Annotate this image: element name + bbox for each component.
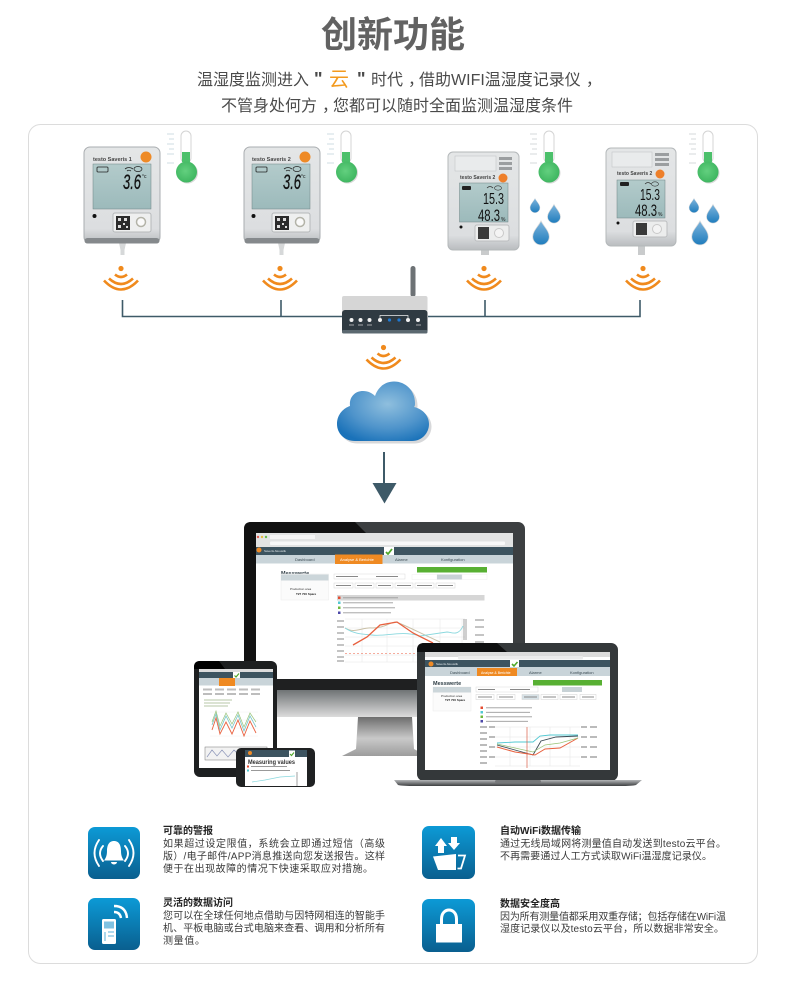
feature: flexible data access: 您可以在全球任何地点借助与因特网相连的智能手 xyxy=(163,909,385,922)
feature: reliable alarm xyxy=(88,824,385,879)
arrow: cloud to dashboard xyxy=(372,452,396,504)
device: desktop monitor xyxy=(244,522,525,756)
device: desktop monitor: Konfiguration xyxy=(441,557,465,562)
device: logger 1 xyxy=(84,147,160,255)
icon: folder with arrows xyxy=(422,826,475,879)
subtitle: " xyxy=(357,69,366,89)
feature: high data security xyxy=(422,897,726,952)
device: logger 3: 48.3 xyxy=(478,206,500,225)
device: logger 2: 3.6 xyxy=(283,171,301,194)
device: logger 1: testo Saveris 1 xyxy=(93,157,132,163)
icon: router xyxy=(342,266,428,334)
device: logger 1: 3.6 xyxy=(123,171,141,194)
feature: high data security: 湿度记录仪以及testo云平台，所以数据非常安全。 xyxy=(500,922,724,935)
subtitle: 不管身处何方 ，您都可以随时全面监测温湿度条件 xyxy=(221,97,573,115)
icon: wifi 4 xyxy=(626,266,660,290)
device: phone: Measuring values xyxy=(248,760,296,766)
feature: automatic WiFi transfer xyxy=(422,824,726,879)
feature: high data security: 因为所有测量值都采用双重存储；包括存储在WiFi温 xyxy=(500,910,726,923)
device: logger 3: testo Saveris 2 xyxy=(460,175,496,181)
feature: reliable alarm: 可靠的警报 xyxy=(163,824,213,837)
device: laptop: T27 700 Spare xyxy=(445,698,466,702)
device: phone xyxy=(236,748,315,787)
device: tablet xyxy=(194,661,277,777)
feature: flexible data access xyxy=(88,896,385,950)
icon: wifi 2 xyxy=(263,266,297,290)
icon: cloud xyxy=(337,382,432,444)
feature: reliable alarm: 便于在出现故障的情况下快速采取应对措施。 xyxy=(163,862,373,875)
device: laptop: Saveris Akoustik xyxy=(436,662,459,666)
feature: flexible data access: 测量值。 xyxy=(163,934,205,947)
icon: water drops 3 xyxy=(530,198,560,245)
device: laptop: Messwerte xyxy=(433,681,461,687)
device: logger 1: °c xyxy=(142,174,147,180)
device: logger 3: % xyxy=(501,217,506,223)
device: laptop: Production area xyxy=(441,694,463,698)
icon: phone with wireless xyxy=(88,898,140,950)
device: desktop monitor: Saveris Akoustik xyxy=(264,549,287,553)
feature: reliable alarm: 如果超过设定限值，系统会立即通过短信（高级 xyxy=(163,837,385,850)
icon: thermometer 4 xyxy=(689,131,720,184)
device: laptop: Dashboard xyxy=(450,670,470,675)
icon: water drops 4 xyxy=(689,198,719,245)
device: desktop monitor: Messwerte xyxy=(281,571,309,577)
device: laptop: Konfiguration xyxy=(570,670,594,675)
panel: main card xyxy=(28,124,758,964)
icon: padlock xyxy=(422,899,475,952)
feature: automatic WiFi transfer: 自动WiFi数据传输 xyxy=(500,824,581,837)
device: desktop monitor: Production area xyxy=(290,587,312,591)
icon: wifi router to cloud xyxy=(366,345,400,368)
device: laptop: Analyse & Berichte xyxy=(481,671,511,675)
device: logger 2 xyxy=(244,147,320,255)
device: logger 3 xyxy=(448,152,519,255)
device: logger 4: % xyxy=(658,212,663,218)
feature: high data security: 数据安全度高 xyxy=(500,897,560,910)
icon: thermometer 1 xyxy=(167,131,198,184)
device: laptop xyxy=(394,643,642,786)
icon: wifi 3 xyxy=(467,266,501,290)
icon: thermometer 3 xyxy=(530,131,560,184)
device: desktop monitor: T27 700 Spare xyxy=(296,592,317,596)
icon: wifi 1 xyxy=(104,266,138,290)
feature: flexible data access: 灵活的数据访问 xyxy=(163,896,233,909)
connection lines xyxy=(122,300,640,316)
device: logger 2: °c xyxy=(301,174,306,180)
feature: flexible data access: 机、平板电脑或台式电脑来查看、调用和分析所有 xyxy=(163,922,385,934)
device: desktop monitor: Alarme xyxy=(395,557,408,562)
device: laptop: Alarme xyxy=(529,670,542,675)
device: logger 4 xyxy=(606,148,676,255)
device: logger 2: testo Saveris 2 xyxy=(252,157,291,163)
device: logger 4: testo Saveris 2 xyxy=(617,171,653,177)
subtitle: 温湿度监测进入 xyxy=(197,71,309,89)
device: logger 4: 15.3 xyxy=(640,187,660,204)
feature: automatic WiFi transfer: 不再需要通过人工方式读取WiFi温湿度记录仪。 xyxy=(500,850,712,862)
icon: thermometer 2 xyxy=(327,131,358,184)
subtitle xyxy=(197,69,602,115)
device: logger 3: 15.3 xyxy=(483,191,504,208)
title: 创新功能 xyxy=(321,14,465,55)
device: desktop monitor: Dashboard xyxy=(295,557,315,562)
subtitle: " xyxy=(314,69,323,89)
device: desktop monitor: Analyse & Berichte xyxy=(340,557,375,562)
device: logger 4: 48.3 xyxy=(635,201,657,220)
feature: automatic WiFi transfer: 通过无线局域网将测量值自动发送到testo云平台。 xyxy=(500,837,726,850)
icon: alarm bell xyxy=(88,827,140,879)
feature: reliable alarm: 版）/电子邮件/APP消息推送向您发送报告。这样 xyxy=(163,850,385,862)
subtitle: 云 xyxy=(329,69,349,91)
subtitle: 时代 ，借助WIFI温湿度记录仪 ， xyxy=(371,71,602,89)
